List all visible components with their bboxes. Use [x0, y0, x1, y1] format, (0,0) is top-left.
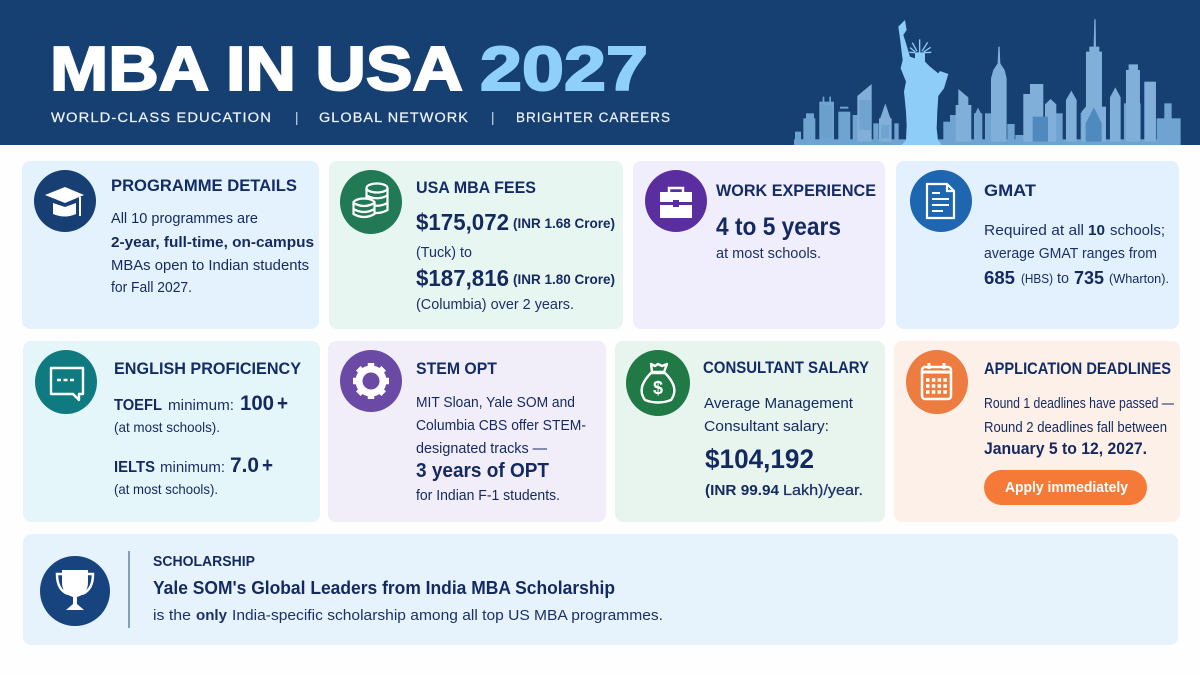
body text: designated tracks —	[416, 441, 547, 457]
heading: STEM OPT	[416, 359, 498, 378]
description: only	[196, 607, 228, 624]
panel: application deadlines	[894, 341, 1180, 522]
tagline: GLOBAL NETWORK	[319, 110, 469, 125]
TOEFL: 100	[240, 392, 274, 415]
panel: STEM OPT	[328, 341, 606, 522]
tagline: |	[295, 110, 300, 125]
panel: consultant salary	[615, 341, 885, 522]
tagline	[51, 110, 671, 125]
TOEFL: TOEFL	[114, 397, 162, 414]
panel: programme details	[22, 161, 319, 329]
heading: APPLICATION DEADLINES	[984, 359, 1171, 378]
body text: MBAs open to Indian students	[111, 257, 309, 274]
stat: 3 years of OPT	[416, 460, 549, 482]
body text: Round 2 deadlines fall between	[984, 420, 1167, 436]
title	[50, 35, 648, 104]
panel: GMAT	[896, 161, 1179, 329]
panel: USA MBA fees	[329, 161, 623, 329]
panel: scholarship	[23, 534, 1178, 645]
stat: $104,192	[705, 444, 814, 474]
IELTS: (at most schools).	[114, 481, 218, 497]
TOEFL: minimum:	[168, 397, 234, 414]
TOEFL: +	[277, 392, 288, 415]
IELTS: +	[262, 454, 273, 477]
tagline: WORLD-CLASS EDUCATION	[51, 110, 272, 125]
icon: trophy	[40, 556, 110, 626]
icon: money bag	[626, 350, 690, 416]
button: Apply immediately	[1005, 480, 1128, 496]
fee high: $187,816	[416, 265, 509, 291]
body text: MIT Sloan, Yale SOM and	[416, 395, 575, 411]
skyline illustration	[794, 19, 1181, 145]
body text: 2-year, full-time, on-campus	[111, 234, 314, 251]
body text: Required at all	[984, 222, 1084, 239]
body text: All 10 programmes are	[111, 210, 258, 227]
body text: Average Management	[704, 395, 854, 412]
body text	[416, 395, 586, 457]
icon: briefcase	[645, 170, 707, 232]
stat: 4 to 5 years	[716, 213, 841, 241]
IELTS	[114, 454, 273, 497]
panel: work experience	[633, 161, 885, 329]
body text	[984, 396, 1174, 436]
icon: gear	[340, 350, 402, 412]
body text: schools;	[1110, 222, 1165, 239]
body text	[111, 210, 314, 296]
icon: graduation cap	[34, 170, 96, 232]
heading: GMAT	[984, 181, 1037, 200]
label: SCHOLARSHIP	[153, 554, 255, 570]
conversion: (INR 99.94	[705, 482, 780, 499]
body text: 685	[984, 268, 1015, 288]
IELTS: 7.0	[230, 454, 259, 477]
heading: ENGLISH PROFICIENCY	[114, 359, 302, 378]
body text	[704, 395, 854, 435]
body text: to	[1057, 270, 1069, 287]
IELTS: IELTS	[114, 459, 155, 476]
body text	[984, 222, 1169, 288]
button	[984, 470, 1147, 505]
divider	[128, 551, 130, 628]
description: is the	[153, 607, 191, 624]
icon: calendar	[906, 350, 968, 414]
heading: PROGRAMME DETAILS	[111, 176, 297, 195]
caption: for Indian F-1 students.	[416, 488, 560, 504]
text: tuck: (Tuck) to	[416, 244, 472, 261]
fee high	[416, 265, 615, 291]
fee low: (INR 1.68 Crore)	[513, 215, 615, 231]
body text: for Fall 2027.	[111, 279, 192, 296]
icon: speech bubble	[35, 350, 97, 414]
icon: document	[910, 170, 972, 232]
heading: WORK EXPERIENCE	[716, 181, 876, 200]
body text: Columbia CBS offer STEM-	[416, 418, 586, 434]
title: MBA IN USA	[50, 35, 463, 104]
icon: coins	[340, 170, 402, 234]
text: columbia: (Columbia) over 2 years.	[416, 296, 574, 313]
fee high: (INR 1.80 Crore)	[513, 271, 615, 287]
fee low: $175,072	[416, 209, 509, 235]
body text: average GMAT ranges from	[984, 245, 1157, 262]
body text: 735	[1074, 268, 1104, 288]
conversion	[705, 482, 863, 499]
body text: 10	[1088, 222, 1105, 239]
heading: USA MBA FEES	[416, 178, 536, 197]
header banner	[0, 0, 1200, 145]
IELTS: minimum:	[160, 459, 225, 476]
heading: CONSULTANT SALARY	[703, 358, 870, 377]
icon: money bag: $	[653, 378, 663, 398]
body text: Consultant salary:	[704, 418, 829, 435]
body text: (Wharton).	[1109, 271, 1169, 286]
fee low	[416, 209, 615, 235]
body text: (HBS)	[1021, 271, 1053, 286]
title: 2027	[480, 35, 648, 104]
panel: english proficiency	[23, 341, 320, 522]
TOEFL: (at most schools).	[114, 419, 220, 435]
caption: at most schools.	[716, 245, 821, 262]
TOEFL	[114, 392, 288, 435]
conversion: Lakh)/year.	[783, 482, 863, 499]
tagline: BRIGHTER CAREERS	[516, 110, 671, 125]
scholarship name: Yale SOM's Global Leaders from India MBA Scholarship	[153, 577, 615, 598]
description: India-specific scholarship among all top US MBA programmes.	[232, 607, 663, 624]
deadline date: January 5 to 12, 2027.	[984, 440, 1147, 458]
tagline: |	[491, 110, 496, 125]
